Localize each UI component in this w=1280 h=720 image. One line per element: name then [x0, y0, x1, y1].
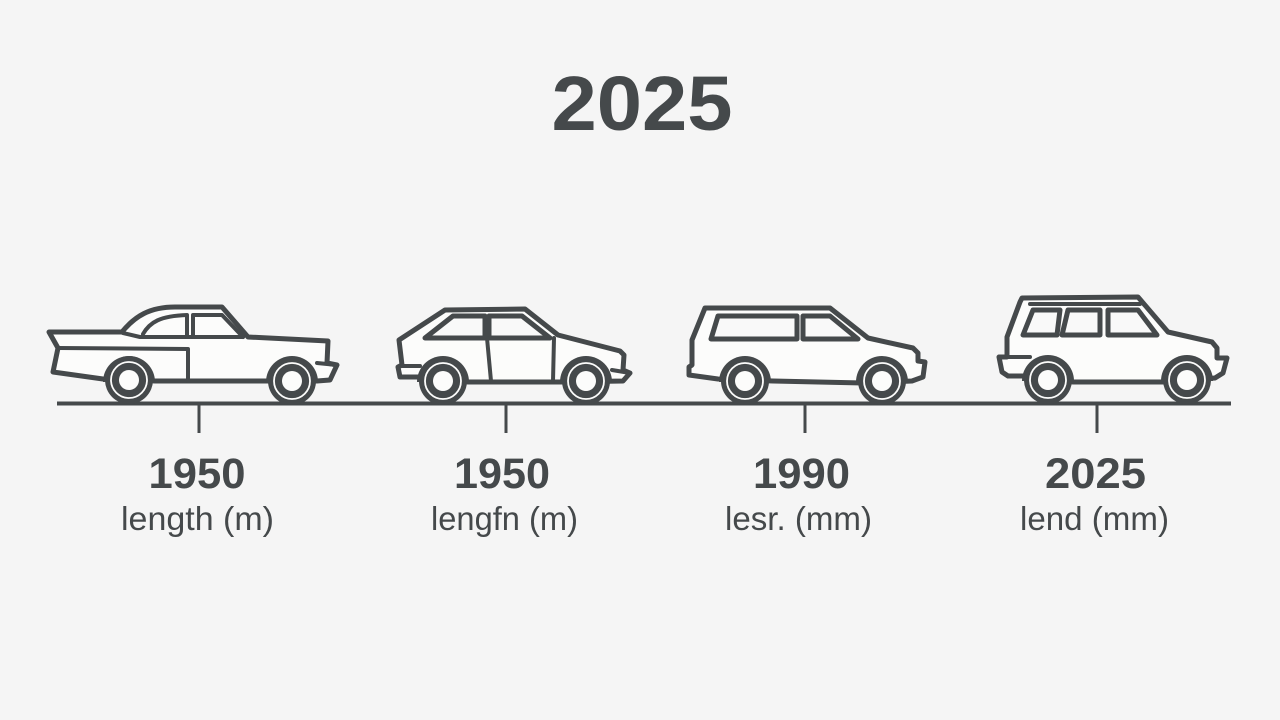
- icon: 2025 SUV with roof rack: [999, 297, 1227, 404]
- wheel: front: [856, 356, 908, 405]
- icon: 1950 hatchback: [398, 309, 630, 405]
- label: 2025: [1020, 450, 1169, 537]
- label: second 1950: lengfn (m): [431, 500, 578, 537]
- wheel: front: [560, 356, 612, 405]
- wheel: rear: [103, 356, 155, 404]
- label: first 1950: length (m): [121, 500, 274, 537]
- icon: 1950 tail-fin coupe: [49, 307, 337, 405]
- label: first 1950: 1950: [148, 450, 246, 498]
- label: 1990: 1990: [753, 450, 850, 498]
- wheel: rear: [719, 356, 771, 405]
- label: 1990: lesr. (mm): [725, 500, 872, 537]
- label: second 1950: [431, 450, 578, 537]
- icon: 1990 station wagon: [689, 308, 925, 405]
- label: 2025: 2025: [1045, 450, 1146, 498]
- wheel: rear: [417, 356, 469, 405]
- wheel: front: [266, 356, 318, 405]
- label: second 1950: 1950: [454, 450, 550, 498]
- label: 2025: lend (mm): [1020, 500, 1169, 537]
- label: first 1950: [121, 450, 274, 537]
- wheel: rear: [1022, 355, 1074, 404]
- timeline axis: [57, 402, 1231, 433]
- wheel: front: [1161, 355, 1213, 404]
- title: 2025: [552, 61, 732, 147]
- label: 1990: [725, 450, 872, 537]
